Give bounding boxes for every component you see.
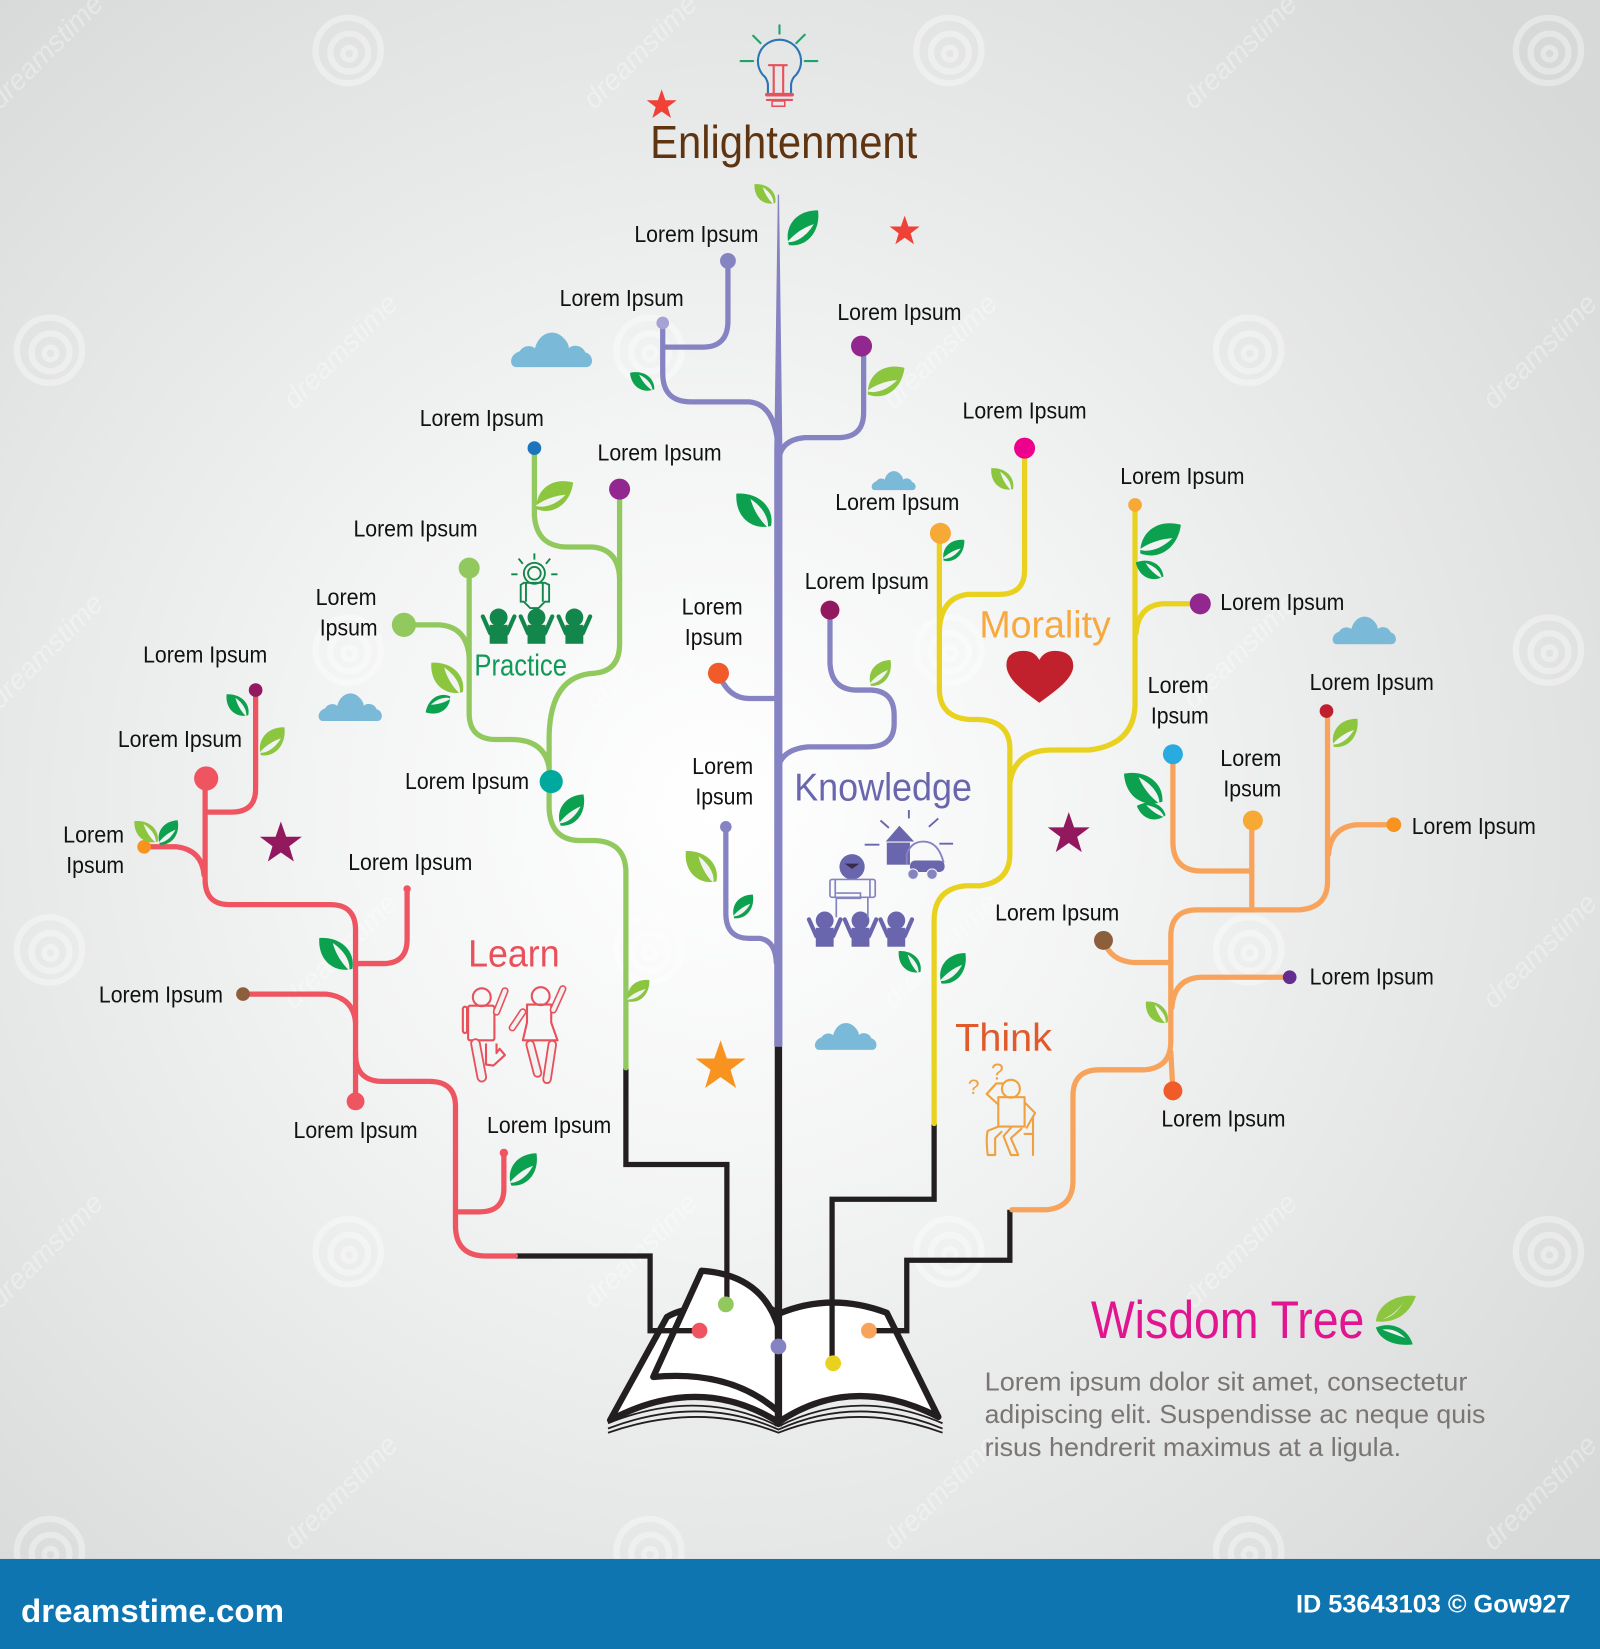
watermarks: dreamstime: [876, 288, 1004, 415]
labels: Lorem Ipsum: [634, 221, 758, 247]
black roots: [515, 1047, 1010, 1426]
branch: practice: Ipsum: [320, 614, 378, 640]
watermarks: dreamstime: [277, 288, 404, 415]
icon: thinker: [968, 1058, 1035, 1155]
icon: open book: [608, 1271, 943, 1433]
branch: knowledge trunk: Lorem Ipsum: [837, 299, 961, 325]
branch lines: [404, 448, 626, 1068]
footer bar: [0, 1559, 1600, 1649]
branch: think: Lorem: [1220, 745, 1281, 771]
branch: think: [955, 669, 1536, 1210]
heading: practice: Practice: [474, 648, 567, 682]
branch: learn: Lorem Ipsum: [293, 1117, 418, 1143]
heading: knowledge: Knowledge: [794, 767, 972, 810]
labels: Lorem Ipsum: [420, 405, 544, 431]
icon: learners: [463, 987, 563, 1079]
description text: risus hendrerit maximus at a ligula.: [985, 1432, 1401, 1462]
branch: learn: Lorem Ipsum: [487, 1112, 611, 1138]
branch: learn: Lorem: [63, 822, 124, 848]
dots: [1320, 704, 1333, 718]
branch: think: Lorem Ipsum: [1310, 964, 1434, 990]
dots: [540, 770, 563, 793]
branch: think: Ipsum: [1223, 775, 1281, 801]
icon: practice group: [483, 553, 590, 644]
labels: Lorem Ipsum: [1310, 669, 1434, 695]
branch: knowledge trunk: [560, 195, 961, 1047]
branch: learn: Lorem Ipsum: [348, 849, 472, 875]
branch: learn: Lorem Ipsum: [118, 726, 242, 752]
branch: morality: Lorem Ipsum: [835, 489, 959, 515]
icon: knowledge teacher and truck: [809, 810, 953, 947]
branch: knowledge trunk: Lorem Ipsum: [805, 568, 929, 594]
branch: practice: Lorem Ipsum: [353, 515, 478, 541]
leaves: [129, 179, 1365, 1192]
branch: practice: Lorem Ipsum: [405, 768, 529, 794]
icon: thinker: ?: [968, 1076, 979, 1099]
branch: learn: Lorem Ipsum: [99, 981, 223, 1007]
watermarks: dreamstime: [1476, 887, 1600, 1015]
watermarks: dreamstime: [277, 887, 404, 1015]
branch: morality: Lorem Ipsum: [1220, 589, 1344, 615]
branch: think: Lorem: [1148, 672, 1209, 698]
watermarks: dreamstime: [1476, 1429, 1600, 1557]
watermarks: dreamstime: [1476, 288, 1600, 415]
icon: wisdom tree leaves: [1376, 1296, 1416, 1345]
icon: light bulb: [741, 25, 817, 106]
branch: morality: [835, 398, 1344, 1123]
watermarks: dreamstime: [1176, 588, 1304, 715]
branch: knowledge trunk: Lorem: [682, 593, 743, 619]
trunk: [774, 195, 782, 1047]
description text: adipiscing elit. Suspendisse ac neque quis: [985, 1399, 1485, 1429]
icon: heart: [1006, 650, 1074, 704]
heading: wisdom tree: Wisdom Tree: [1091, 1291, 1364, 1350]
dots: [194, 766, 218, 791]
watermarks: dreamstime: [577, 588, 704, 715]
stars: [260, 89, 1090, 1088]
branch: think: Ipsum: [1151, 703, 1209, 729]
book root dots: [692, 1296, 877, 1371]
labels: Lorem Ipsum: [143, 642, 267, 668]
branch lines: [663, 261, 894, 963]
heading: learn: Learn: [468, 934, 560, 976]
watermarks: dreamstime: [277, 1429, 404, 1557]
dots: [720, 253, 736, 269]
heading: morality: Morality: [979, 604, 1111, 646]
branch: practice: [316, 405, 722, 1068]
branch: think: Lorem Ipsum: [1161, 1106, 1285, 1132]
watermarks: dreamstime: [1176, 1187, 1304, 1315]
clouds: [319, 333, 1396, 1050]
branch: knowledge trunk: Lorem: [692, 753, 753, 779]
icon: thinker: ?: [991, 1058, 1004, 1084]
branch: learn: [63, 642, 611, 1256]
branch: morality: Lorem Ipsum: [1120, 463, 1244, 489]
branch: knowledge trunk: Ipsum: [685, 624, 743, 650]
footer logo: dreamstime.com: [21, 1592, 284, 1629]
footer id: ID 53643103 © Gow927: [1296, 1591, 1571, 1619]
labels: Lorem Ipsum: [963, 398, 1087, 424]
branch: practice: Lorem: [316, 584, 377, 610]
branch lines: [934, 448, 1200, 1123]
branch: practice: Lorem Ipsum: [598, 440, 722, 466]
branch lines: [1012, 711, 1394, 1210]
branch: think: Lorem Ipsum: [1412, 813, 1536, 839]
branch: learn: Ipsum: [66, 852, 124, 878]
branch lines: [144, 690, 515, 1256]
branch: knowledge trunk: Ipsum: [695, 784, 753, 810]
watermarks: dreamstime: [876, 887, 1004, 1015]
description text: Lorem ipsum dolor sit amet, consectetur: [985, 1367, 1468, 1397]
branch: think: Lorem Ipsum: [995, 899, 1119, 925]
title: enlightenment: Enlightenment: [650, 116, 917, 168]
description text: [985, 1367, 1485, 1462]
dots: [930, 523, 951, 544]
watermarks: dreamstime: [577, 1187, 704, 1315]
heading: think: Think: [955, 1017, 1052, 1060]
branch: knowledge trunk: Lorem Ipsum: [560, 285, 684, 311]
watermarks: dreamstime: [876, 1429, 1004, 1557]
